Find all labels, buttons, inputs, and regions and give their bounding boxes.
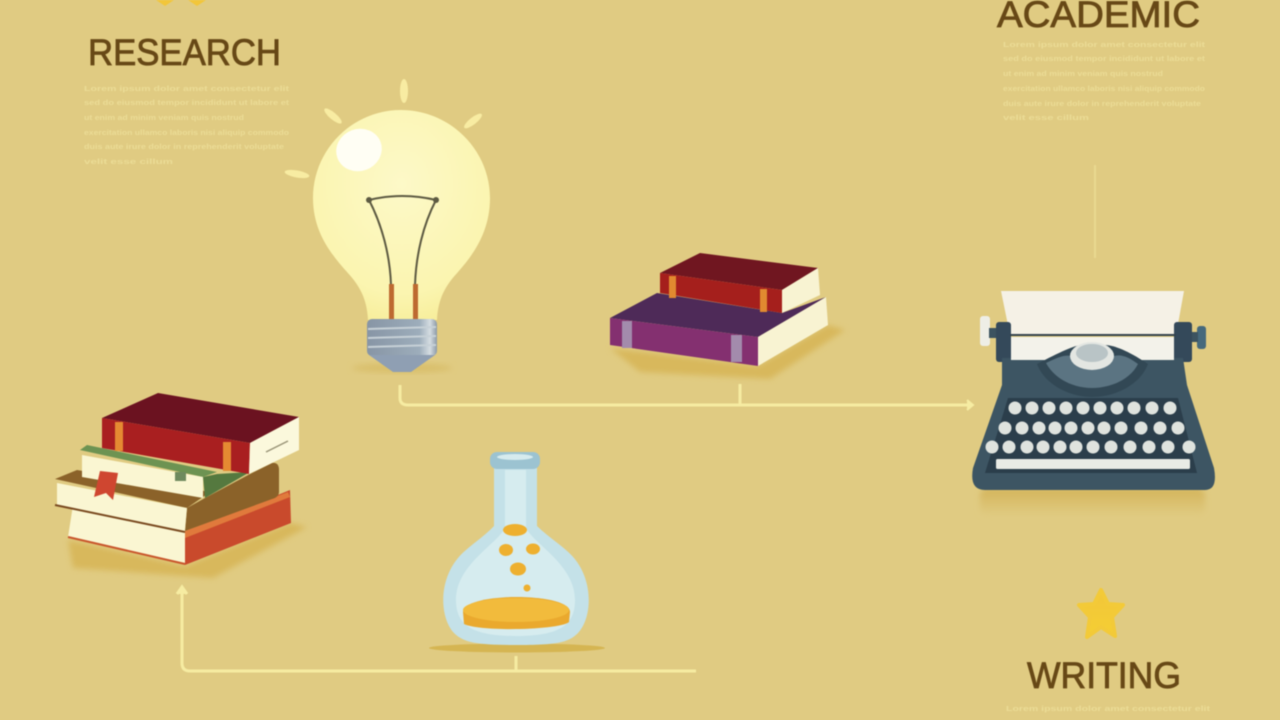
- text block: research description: [84, 84, 290, 166]
- icon: large book stack: [55, 393, 307, 578]
- icon: flask: [429, 452, 605, 652]
- text block: research description: velit esse cillum: [84, 157, 173, 166]
- typewriter space bar: [996, 459, 1190, 469]
- text block: research description: duis aute irure dolor in reprehenderit voluptate: [84, 142, 284, 151]
- icon: two stacked books: [610, 253, 845, 379]
- text block: academic description: Lorem ipsum dolor amet consectetur elit: [1003, 40, 1206, 49]
- icon: star: [1079, 590, 1123, 637]
- connector: academic to typewriter: [1094, 165, 1096, 258]
- text block: research description: exercitation ullamco laboris nisi aliquip commodo: [84, 128, 289, 137]
- text block: research description: Lorem ipsum dolor amet consectetur elit: [84, 84, 290, 93]
- connector: flask to book stack: [177, 587, 696, 671]
- flask liquid: [463, 597, 570, 629]
- text block: academic description: velit esse cillum: [1003, 113, 1089, 122]
- heading: writing: WRITING: [1027, 655, 1181, 696]
- text block: academic description: sed do eiusmod tempor incididunt ut labore et: [1003, 54, 1206, 63]
- text block: academic description: exercitation ullamco laboris nisi aliquip commodo: [1003, 84, 1205, 93]
- text block: writing description: Lorem ipsum dolor amet consectetur elit: [1006, 704, 1211, 713]
- icon: cropped stars at top: [156, 0, 206, 6]
- icon: light bulb: [284, 79, 490, 373]
- text block: research description: ut enim ad minim veniam quis nostrud: [84, 113, 244, 122]
- text block: academic description: ut enim ad minim veniam quis nostrud: [1003, 69, 1163, 78]
- connector: bulb and books to typewriter: [400, 384, 973, 410]
- text block: academic description: duis aute irure dolor in reprehenderit voluptate: [1003, 99, 1201, 108]
- icon: typewriter: [972, 291, 1215, 516]
- bookmark ribbon: [94, 471, 118, 500]
- text block: academic description: [1003, 40, 1206, 122]
- heading: research: RESEARCH: [88, 32, 281, 73]
- text block: research description: sed do eiusmod tempor incididunt ut labore et: [84, 98, 290, 107]
- typewriter keys: [986, 402, 1196, 454]
- flask bubbles: [499, 524, 540, 592]
